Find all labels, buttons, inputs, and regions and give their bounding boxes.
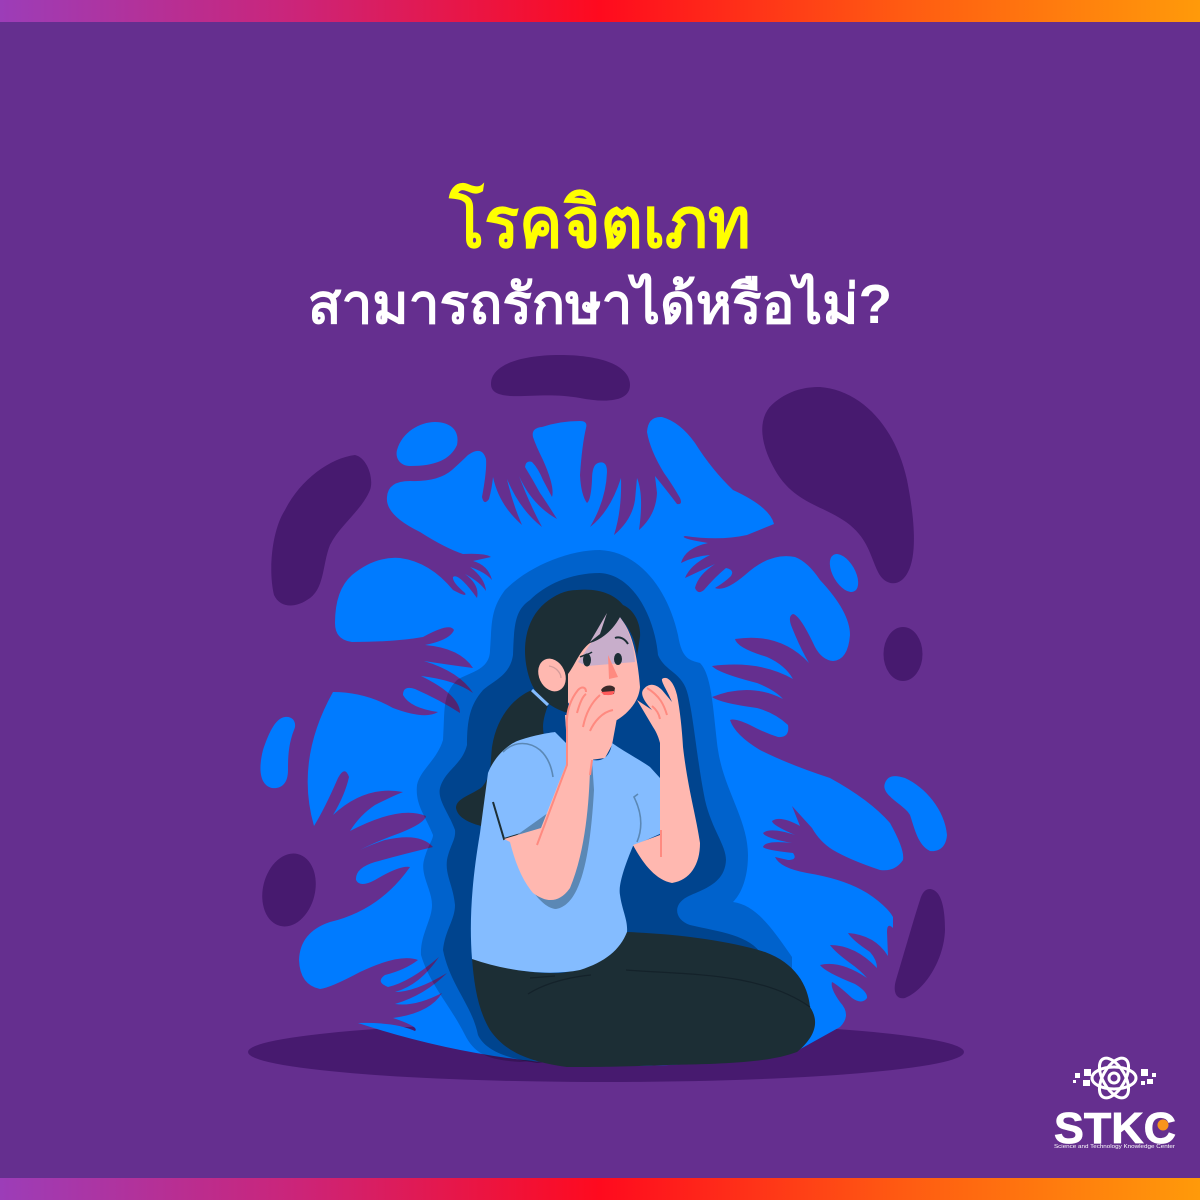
nose xyxy=(608,655,618,679)
logo tagline: Science and Technology Knowledge Center xyxy=(1054,1144,1175,1150)
face shadow xyxy=(578,617,635,666)
right hand finger lines xyxy=(647,688,667,857)
logo pixel dots xyxy=(1073,1069,1156,1086)
mouth xyxy=(601,686,615,695)
raised arm (right) xyxy=(633,678,700,883)
title: สามารถรักษาได้หรือไม่? xyxy=(308,272,892,335)
arm shadow xyxy=(510,760,594,909)
floor shadow xyxy=(248,1022,964,1082)
shirt seams xyxy=(503,744,641,842)
neck xyxy=(565,715,617,760)
pants xyxy=(472,932,815,1067)
ponytail xyxy=(456,690,548,828)
title xyxy=(308,182,892,335)
bottom gradient bar xyxy=(0,1178,1200,1200)
logo atom icon xyxy=(1092,1053,1136,1103)
logo wordmark: STKC xyxy=(1054,1104,1176,1153)
dark decorative blobs xyxy=(255,355,945,998)
woman xyxy=(456,590,815,1067)
ear detail xyxy=(549,666,561,678)
hair strand xyxy=(590,613,607,642)
logo: STKC xyxy=(1054,1053,1176,1153)
inner halo xyxy=(440,573,762,1063)
shirt xyxy=(471,732,662,973)
outer halo xyxy=(417,550,792,1062)
blue blob: top left xyxy=(397,422,458,466)
eyes xyxy=(583,654,591,666)
face xyxy=(560,618,640,722)
hair xyxy=(525,590,640,713)
blue blob: right xyxy=(884,776,947,851)
ear xyxy=(533,654,571,696)
pants creases xyxy=(528,970,810,1007)
hair tie xyxy=(532,690,548,705)
title: โรคจิตเภท xyxy=(448,182,751,263)
top gradient bar xyxy=(0,0,1200,22)
logo orange dot xyxy=(1158,1120,1168,1130)
raised arm finger lines xyxy=(537,688,613,845)
sleeve hem xyxy=(493,802,541,839)
raised arm and hand (left) xyxy=(504,687,615,900)
blue blob: small right xyxy=(824,549,864,597)
blue blob: far left xyxy=(260,717,295,788)
blue aura with shadow hands xyxy=(260,417,947,1066)
eyebrow xyxy=(615,637,628,644)
